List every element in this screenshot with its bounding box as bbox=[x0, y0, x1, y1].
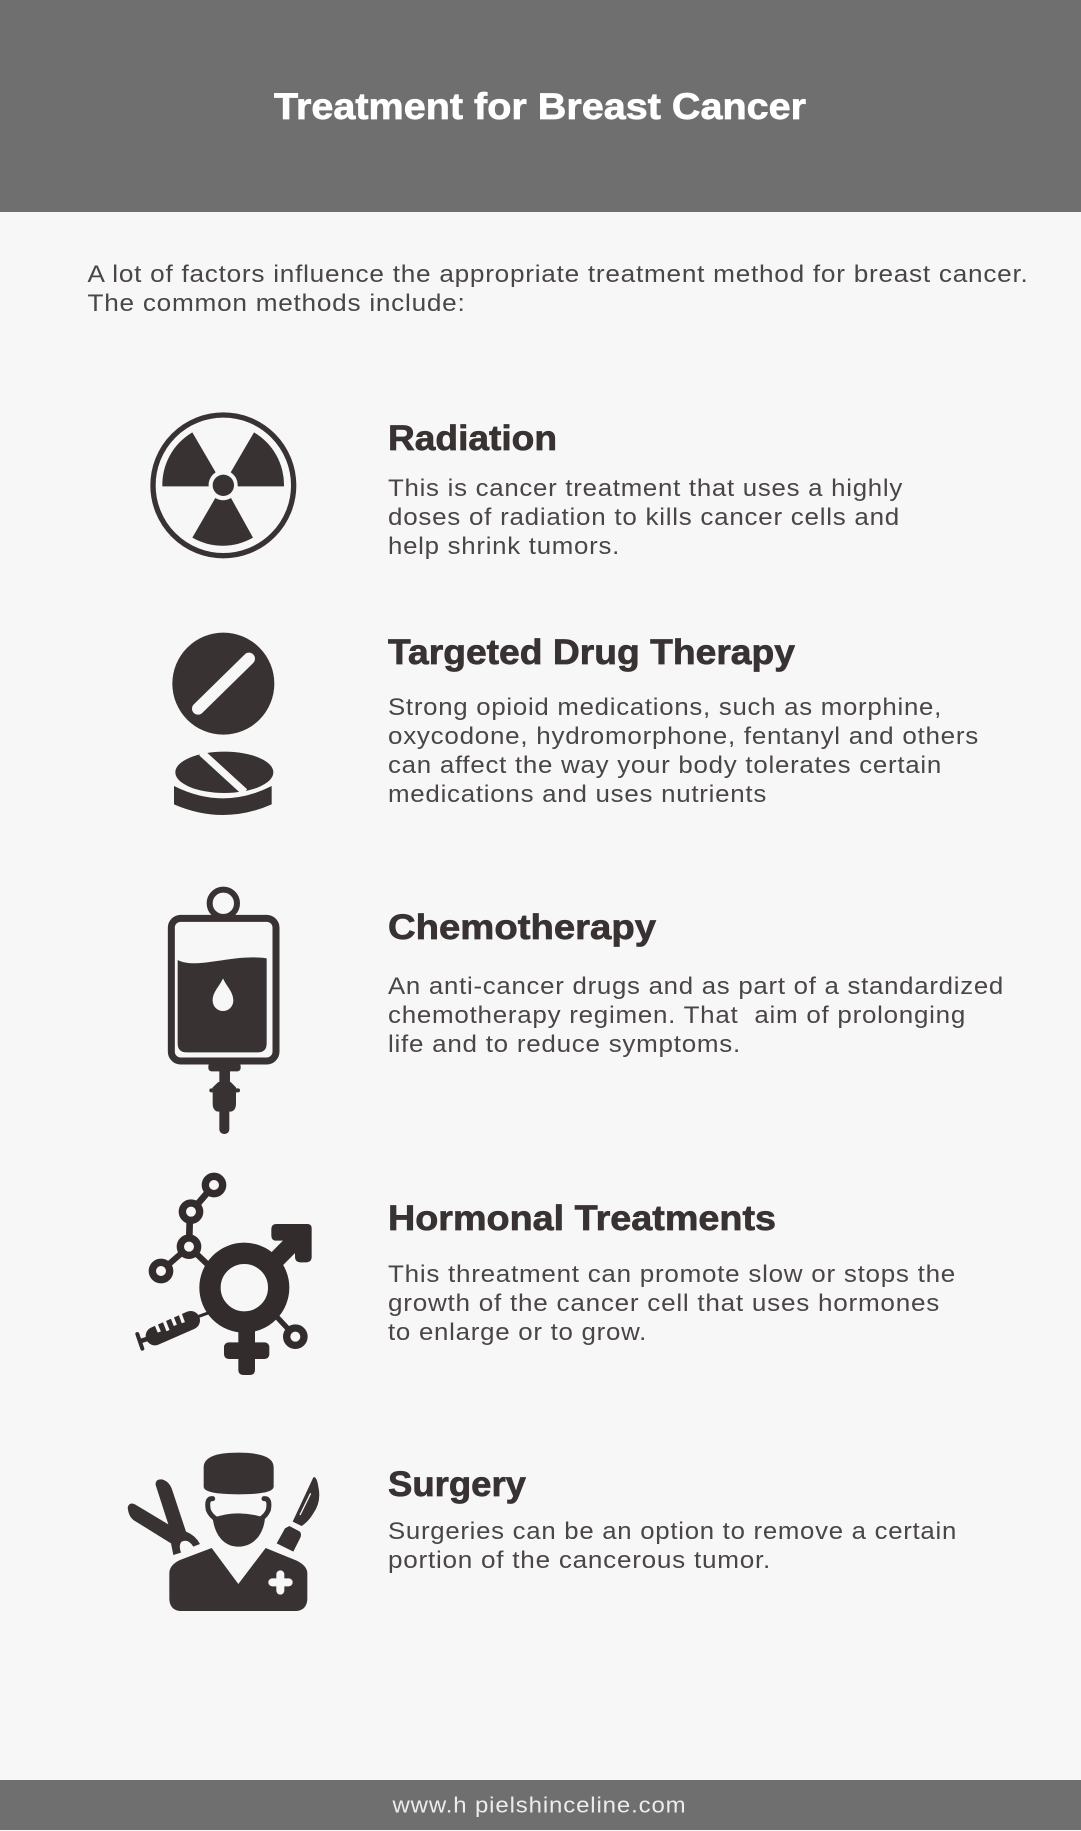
text: chemotherapy description: life and to reduce symptoms. bbox=[388, 1031, 741, 1058]
text: surgery description: portion of the cancerous tumor. bbox=[388, 1547, 771, 1574]
text: radiation description: help shrink tumors. bbox=[388, 533, 620, 560]
panel: chemotherapy bbox=[171, 890, 1004, 1134]
text: chemotherapy description: An anti-cancer drugs and as part of a standardized bbox=[388, 973, 1004, 1000]
heading: hormonal treatments: Hormonal Treatments bbox=[388, 1199, 776, 1238]
text: chemotherapy description bbox=[388, 973, 1004, 1058]
text: surgery description: Surgeries can be an option to remove a certain bbox=[388, 1518, 957, 1545]
text: radiation description bbox=[388, 475, 903, 560]
intro text bbox=[88, 261, 1028, 317]
text: hormonal treatments description: to enlarge or to grow. bbox=[388, 1319, 647, 1346]
panel: targeted drug therapy bbox=[172, 633, 979, 815]
heading: surgery: Surgery bbox=[388, 1465, 527, 1504]
panel: radiation bbox=[153, 415, 903, 560]
footer band bbox=[0, 1780, 1081, 1830]
text: radiation description: This is cancer treatment that uses a highly bbox=[388, 475, 903, 502]
icon: hormone symbol with molecule and syringe bbox=[137, 1176, 312, 1375]
text: hormonal treatments description bbox=[388, 1261, 956, 1346]
intro text: The common methods include: bbox=[88, 290, 466, 317]
intro text: A lot of factors influence the appropriate treatment method for breast cancer. bbox=[88, 261, 1028, 288]
text: hormonal treatments description: This threatment can promote slow or stops the bbox=[388, 1261, 956, 1288]
icon: surgeon bbox=[128, 1453, 319, 1611]
panel: surgery bbox=[128, 1453, 957, 1611]
footer url: www.h pielshinceline.com bbox=[391, 1792, 686, 1818]
heading: targeted drug therapy: Targeted Drug Therapy bbox=[388, 633, 796, 672]
text: targeted drug therapy description: oxycodone, hydromorphone, fentanyl and others bbox=[388, 723, 979, 750]
text: chemotherapy description: chemotherapy regimen. That aim of prolonging bbox=[388, 1002, 966, 1029]
text: targeted drug therapy description: Strong opioid medications, such as morphine, bbox=[388, 694, 942, 721]
heading: chemotherapy: Chemotherapy bbox=[388, 908, 657, 947]
text: surgery description bbox=[388, 1518, 957, 1574]
heading: radiation: Radiation bbox=[388, 419, 557, 458]
header band bbox=[0, 0, 1081, 212]
text: targeted drug therapy description bbox=[388, 694, 979, 808]
text: targeted drug therapy description: can affect the way your body tolerates certain bbox=[388, 752, 942, 779]
title: Treatment for Breast Cancer bbox=[274, 86, 806, 127]
text: hormonal treatments description: growth of the cancer cell that uses hormones bbox=[388, 1290, 940, 1317]
text: radiation description: doses of radiation to kills cancer cells and bbox=[388, 504, 900, 531]
icon: IV bag bbox=[171, 890, 276, 1134]
text: targeted drug therapy description: medications and uses nutrients bbox=[388, 781, 767, 808]
icon: radiation symbol bbox=[153, 415, 294, 556]
panel: hormonal treatments bbox=[137, 1176, 956, 1375]
icon: pills bbox=[172, 633, 274, 815]
